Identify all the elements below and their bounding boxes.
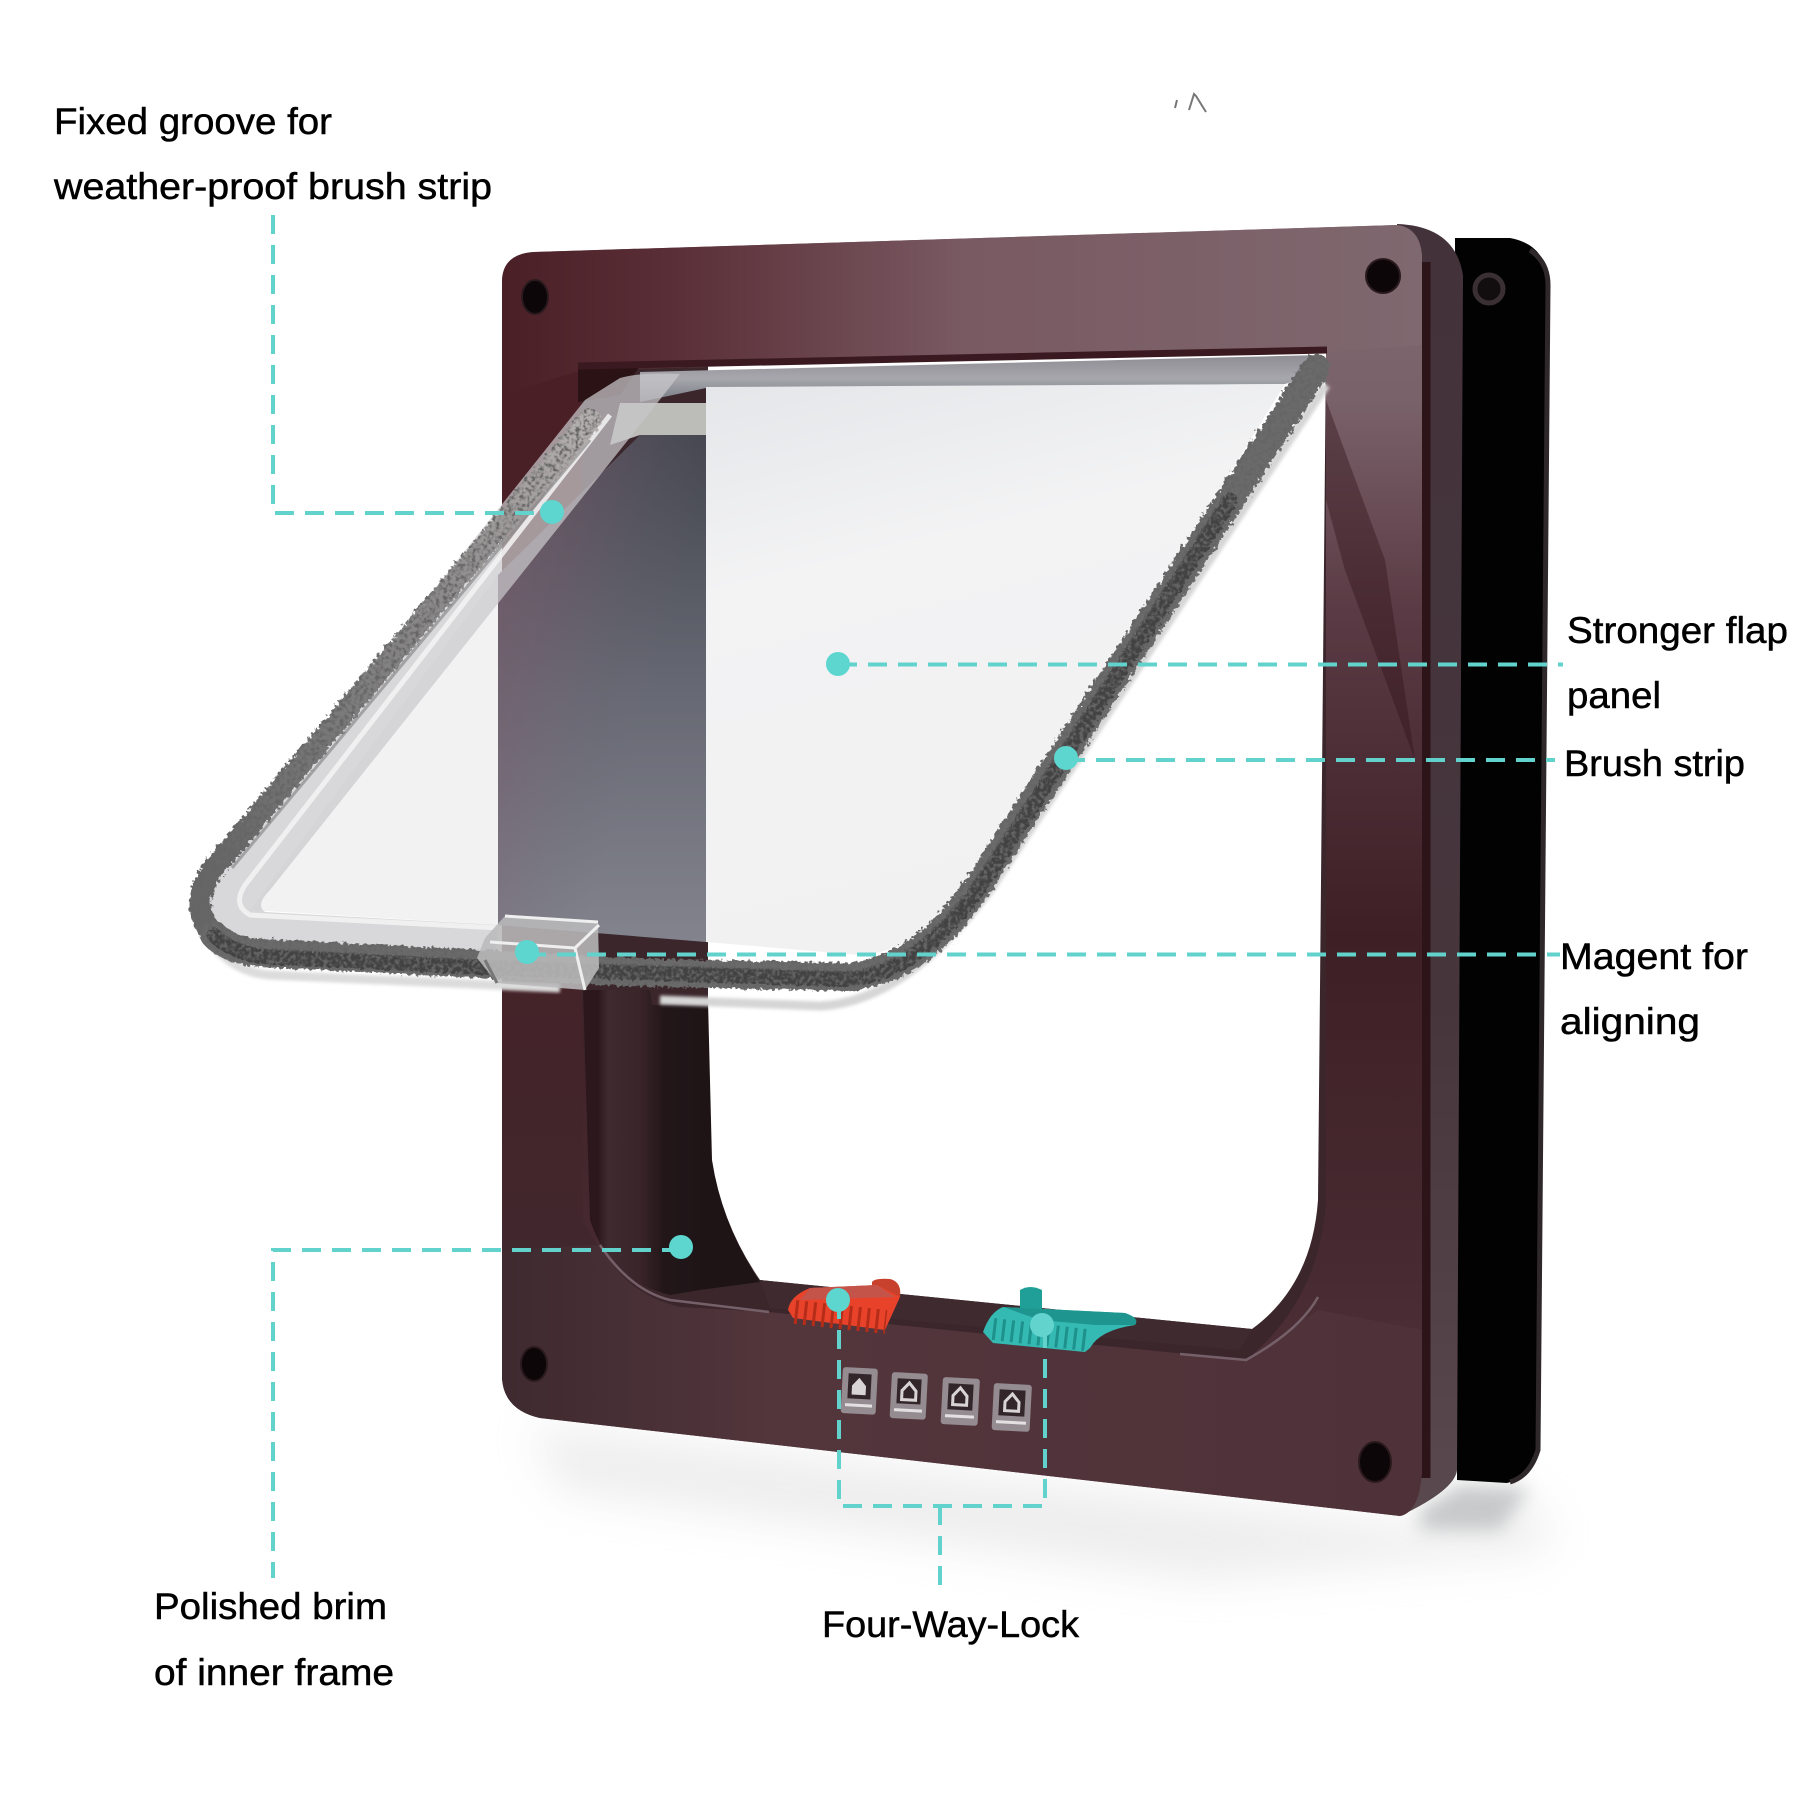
right band highlight <box>1326 400 1415 760</box>
teal lock slider <box>983 1287 1136 1352</box>
inner channel <box>582 352 1326 1360</box>
callout: polished brim <box>154 1235 693 1693</box>
callout: brush strip: Brush strip <box>1564 743 1745 784</box>
screw holes <box>521 259 1400 1482</box>
product: cat flap frame <box>502 224 1548 1516</box>
glass band <box>194 374 680 958</box>
transparent flap <box>194 350 1327 1006</box>
magnet block <box>477 916 599 990</box>
callout: magnet: Magent for <box>1560 936 1748 977</box>
left triangle pane <box>250 575 498 925</box>
frame bottom band <box>502 1245 1422 1516</box>
frame front face <box>502 225 1422 1516</box>
callout: magnet: aligning <box>1560 1001 1700 1042</box>
callout: fixed groove <box>53 101 564 524</box>
callout: four-way lock <box>822 1288 1079 1645</box>
dark gap at top <box>578 366 640 402</box>
back panel <box>1455 238 1548 1483</box>
callout: stronger flap panel: panel <box>1567 675 1661 716</box>
rim highlight <box>600 1245 1318 1360</box>
callout: magnet <box>515 936 1748 1042</box>
left channel wall <box>583 990 760 1295</box>
callout: polished brim: Polished brim <box>154 1586 387 1627</box>
callout: four-way lock: Four-Way-Lock <box>822 1604 1079 1645</box>
floor shadow <box>530 1425 1550 1580</box>
dark stripe <box>1422 262 1430 1478</box>
right clear rim <box>660 385 1326 1006</box>
callout: fixed groove: weather-proof brush strip <box>53 166 492 207</box>
small stray mark <box>1175 94 1206 112</box>
window opening <box>708 352 1326 1329</box>
frame left band <box>502 370 640 1418</box>
dark window top line <box>578 350 1327 366</box>
callout: polished brim: of inner frame <box>154 1652 394 1693</box>
frame top band <box>502 225 1422 400</box>
four-way lock sliders <box>788 1279 1136 1432</box>
brush strip <box>200 368 1316 979</box>
white flap panel <box>706 384 1285 955</box>
gray see-through region <box>498 435 706 942</box>
callout: fixed groove: Fixed groove for <box>54 101 332 142</box>
top glass strip <box>640 355 1326 402</box>
frame side edge <box>1397 224 1463 1516</box>
callout: stronger flap panel <box>826 610 1788 716</box>
lock mode icons <box>841 1367 1032 1432</box>
red lock slider <box>788 1279 900 1330</box>
light strip above gray <box>610 403 706 445</box>
callout: stronger flap panel: Stronger flap <box>1567 610 1788 651</box>
lower clear rim <box>200 925 560 988</box>
bottom sill <box>760 1280 1252 1350</box>
callout: brush strip <box>1054 743 1745 784</box>
